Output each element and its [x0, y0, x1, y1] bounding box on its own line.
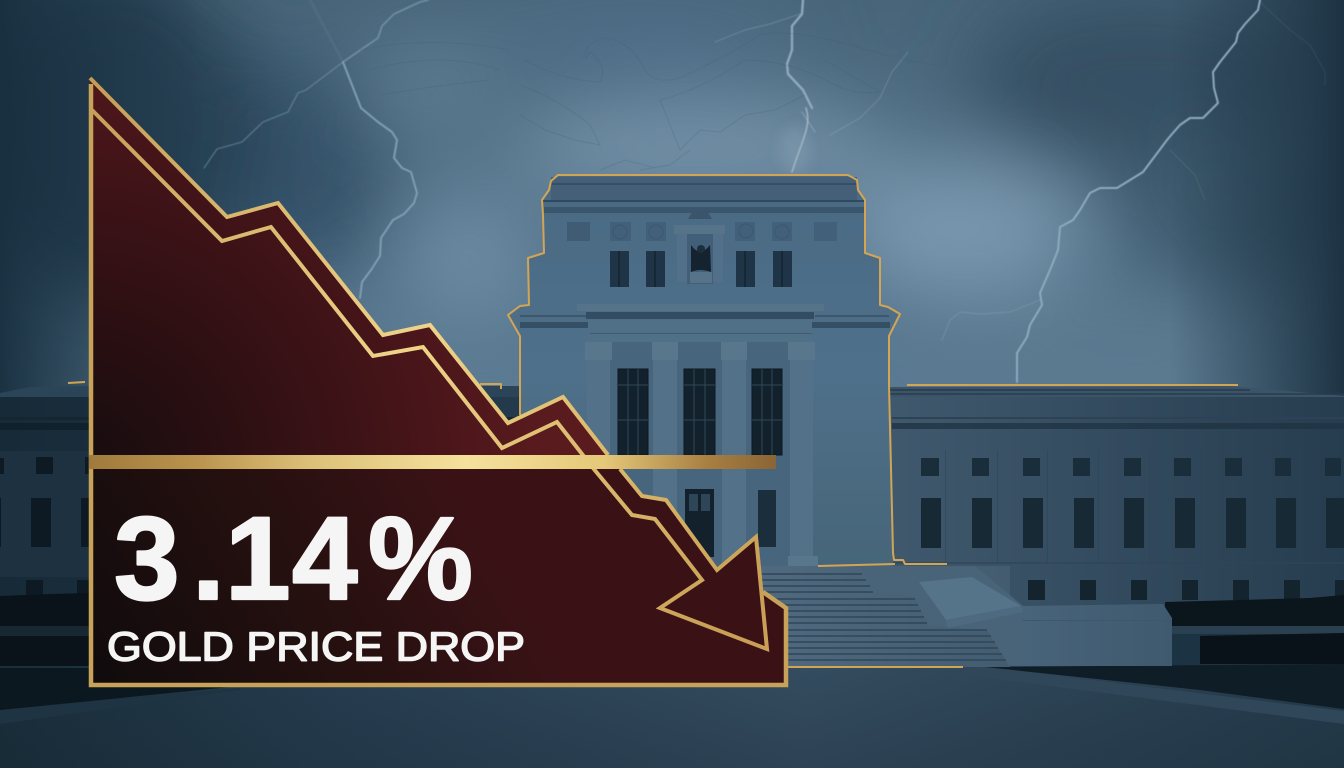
left wing roof	[0, 386, 520, 397]
left wing building	[0, 386, 520, 710]
right wing tiled roof	[890, 386, 1344, 397]
panel border	[91, 84, 786, 685]
right hedges and lawn	[1165, 595, 1344, 626]
stair treads	[762, 574, 1006, 660]
arrow outline lower	[92, 110, 767, 649]
ramp slab	[919, 577, 1021, 620]
left curb	[0, 688, 240, 724]
stat: 3.14%: 3.14%	[114, 493, 473, 625]
columns	[587, 342, 813, 568]
maroon drop arrow panel	[90, 78, 786, 685]
left hedge and lawn	[0, 593, 90, 626]
lightning bolt: right	[942, 0, 1325, 382]
ground plaza	[0, 664, 1344, 768]
left wing windows	[0, 457, 93, 600]
central building	[508, 176, 900, 568]
lightning bolt: top centre	[715, 0, 908, 174]
gold horizontal bar	[89, 455, 776, 469]
portico recess	[595, 342, 809, 566]
stone block	[1023, 604, 1172, 666]
pilasters	[945, 450, 1301, 562]
attic band	[551, 177, 857, 200]
lightning bolts	[204, 0, 1325, 382]
arrow outline upper	[90, 78, 608, 455]
gold building outline	[68, 175, 1238, 667]
arrow fill	[90, 78, 786, 685]
label: gold price drop: GOLD PRICE DROP	[107, 624, 525, 670]
attic windows	[610, 251, 792, 287]
right wing upper windows	[921, 458, 1341, 476]
portico windows	[618, 369, 782, 455]
right wing basement windows	[1028, 580, 1344, 600]
right wing building	[880, 386, 1344, 664]
stairs and plinth	[760, 566, 1172, 667]
plinth wall	[860, 566, 1023, 666]
attic reliefs	[567, 222, 837, 241]
faint eagle in clouds	[360, 33, 935, 170]
stormy sky background	[0, 0, 1344, 420]
lightning bolt: left	[204, 0, 428, 298]
portico door and window	[685, 489, 776, 557]
lower panel fill	[90, 469, 786, 685]
main cornice	[577, 304, 824, 311]
right lawn and curb	[985, 664, 1344, 709]
central niche	[674, 209, 725, 284]
right wing tall windows	[921, 498, 1344, 548]
